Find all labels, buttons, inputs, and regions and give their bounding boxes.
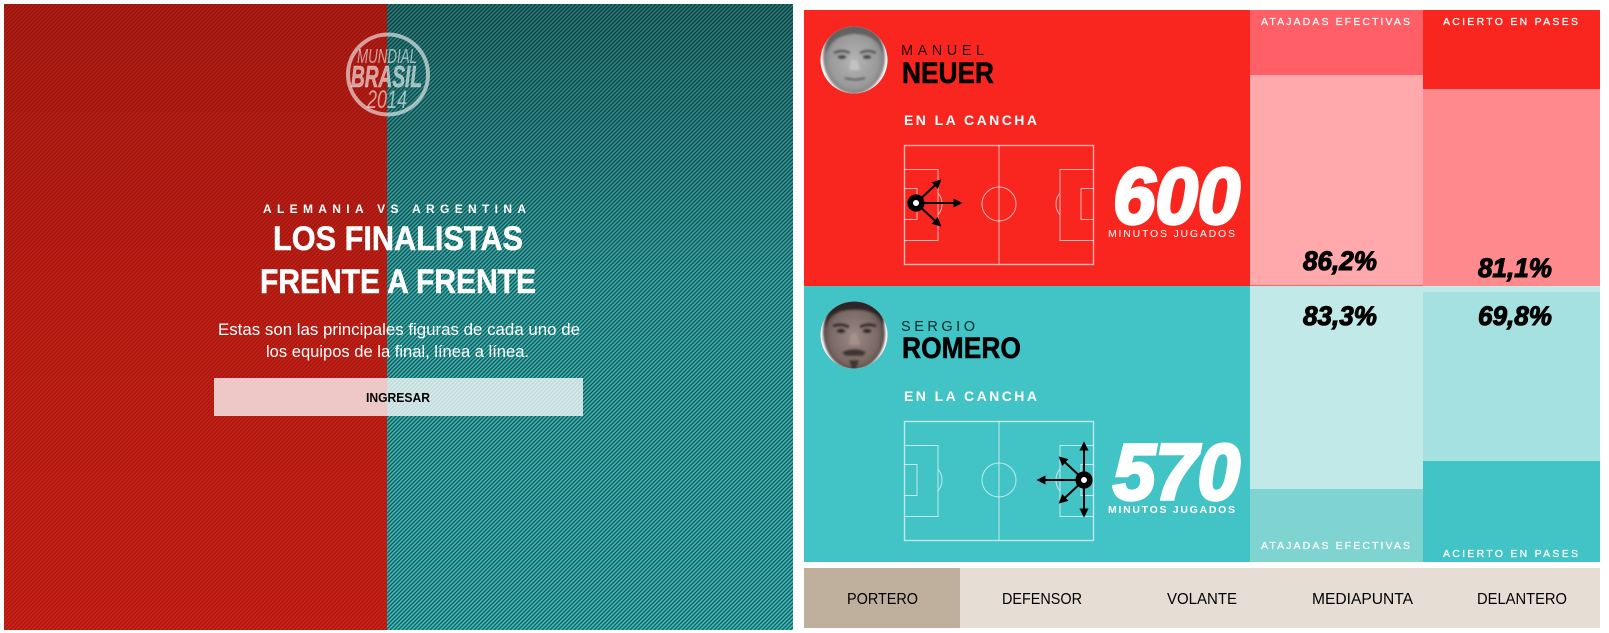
kicker: ALEMANIA VS ARGENTINA [263, 202, 526, 216]
title: FRENTE A FRENTE [260, 263, 536, 301]
bar: Neuer passes [1423, 10, 1600, 286]
bar: Romero passes: ACIERTO EN PASES [1443, 548, 1578, 560]
surname: NEUER [902, 57, 994, 90]
top shading on teal [387, 4, 793, 630]
title [260, 220, 536, 301]
background: Alemania red half [4, 4, 387, 630]
bar: Romero saves [1250, 286, 1423, 562]
stat: minutes played: 600 [1113, 151, 1240, 240]
logo: Mundial Brasil 2014: MUNDIAL [357, 46, 417, 68]
bar: Neuer saves: ATAJADAS EFECTIVAS [1261, 16, 1410, 28]
bar: Romero saves: ATAJADAS EFECTIVAS [1261, 540, 1410, 552]
nav item: mediapunta: MEDIAPUNTA [1312, 591, 1414, 608]
panel: Manuel Neuer [804, 10, 1250, 286]
pitch diagram [904, 145, 1094, 264]
bar: Neuer saves: 86,2% [1303, 246, 1377, 276]
stat: minutes played: 570 [1113, 427, 1240, 516]
nav item: portero active: PORTERO [847, 591, 918, 608]
nav item: volante: VOLANTE [1167, 591, 1237, 608]
panel background teal [804, 286, 1250, 562]
navigation: player positions [804, 568, 1600, 628]
nav item: delantero: DELANTERO [1477, 591, 1567, 608]
intro text [218, 321, 580, 361]
panel: Sergio Romero [804, 286, 1250, 562]
chart: acierto en pases [1423, 10, 1600, 562]
player position arrows [910, 182, 958, 224]
bar: Romero passes: 69,8% [1478, 301, 1552, 331]
logo: Mundial Brasil 2014: 2014 [366, 86, 407, 114]
player position arrows [1041, 446, 1090, 513]
background: Argentina teal half [387, 4, 793, 630]
caption: minutos jugados: MINUTOS JUGADOS [1108, 504, 1235, 516]
first name: MANUEL [901, 43, 984, 59]
button: ingresar [214, 378, 583, 416]
chart: atajadas efectivas [1250, 10, 1423, 562]
nav background [804, 568, 1600, 628]
nav item: portero active [804, 568, 960, 628]
logo: Mundial Brasil 2014 [348, 34, 428, 114]
caption: minutos jugados: MINUTOS JUGADOS [1108, 228, 1235, 240]
button: ingresar: INGRESAR [366, 391, 430, 405]
panel: cover [4, 4, 793, 630]
surname: ROMERO [902, 332, 1021, 365]
nav item: defensor: DEFENSOR [1002, 591, 1082, 608]
portrait: Romero [820, 300, 888, 370]
top shading on red [4, 4, 387, 630]
label: en la cancha: EN LA CANCHA [904, 112, 1037, 128]
bar: Romero passes [1423, 286, 1600, 562]
panel background red [804, 10, 1250, 286]
intro text: los equipos de la final, línea a línea. [266, 343, 529, 361]
bar: Neuer passes: ACIERTO EN PASES [1443, 16, 1578, 28]
bar: Neuer saves [1250, 10, 1423, 286]
title: LOS FINALISTAS [273, 220, 523, 258]
bar: Romero saves: 83,3% [1303, 301, 1377, 331]
portrait: Neuer [820, 25, 888, 94]
label: en la cancha: EN LA CANCHA [904, 388, 1037, 404]
intro text: Estas son las principales figuras de cada uno de [218, 321, 580, 339]
pitch diagram [904, 421, 1094, 540]
logo: Mundial Brasil 2014: BRASIL [351, 59, 422, 94]
first name: SERGIO [901, 319, 975, 335]
bar: Neuer passes: 81,1% [1478, 253, 1552, 283]
